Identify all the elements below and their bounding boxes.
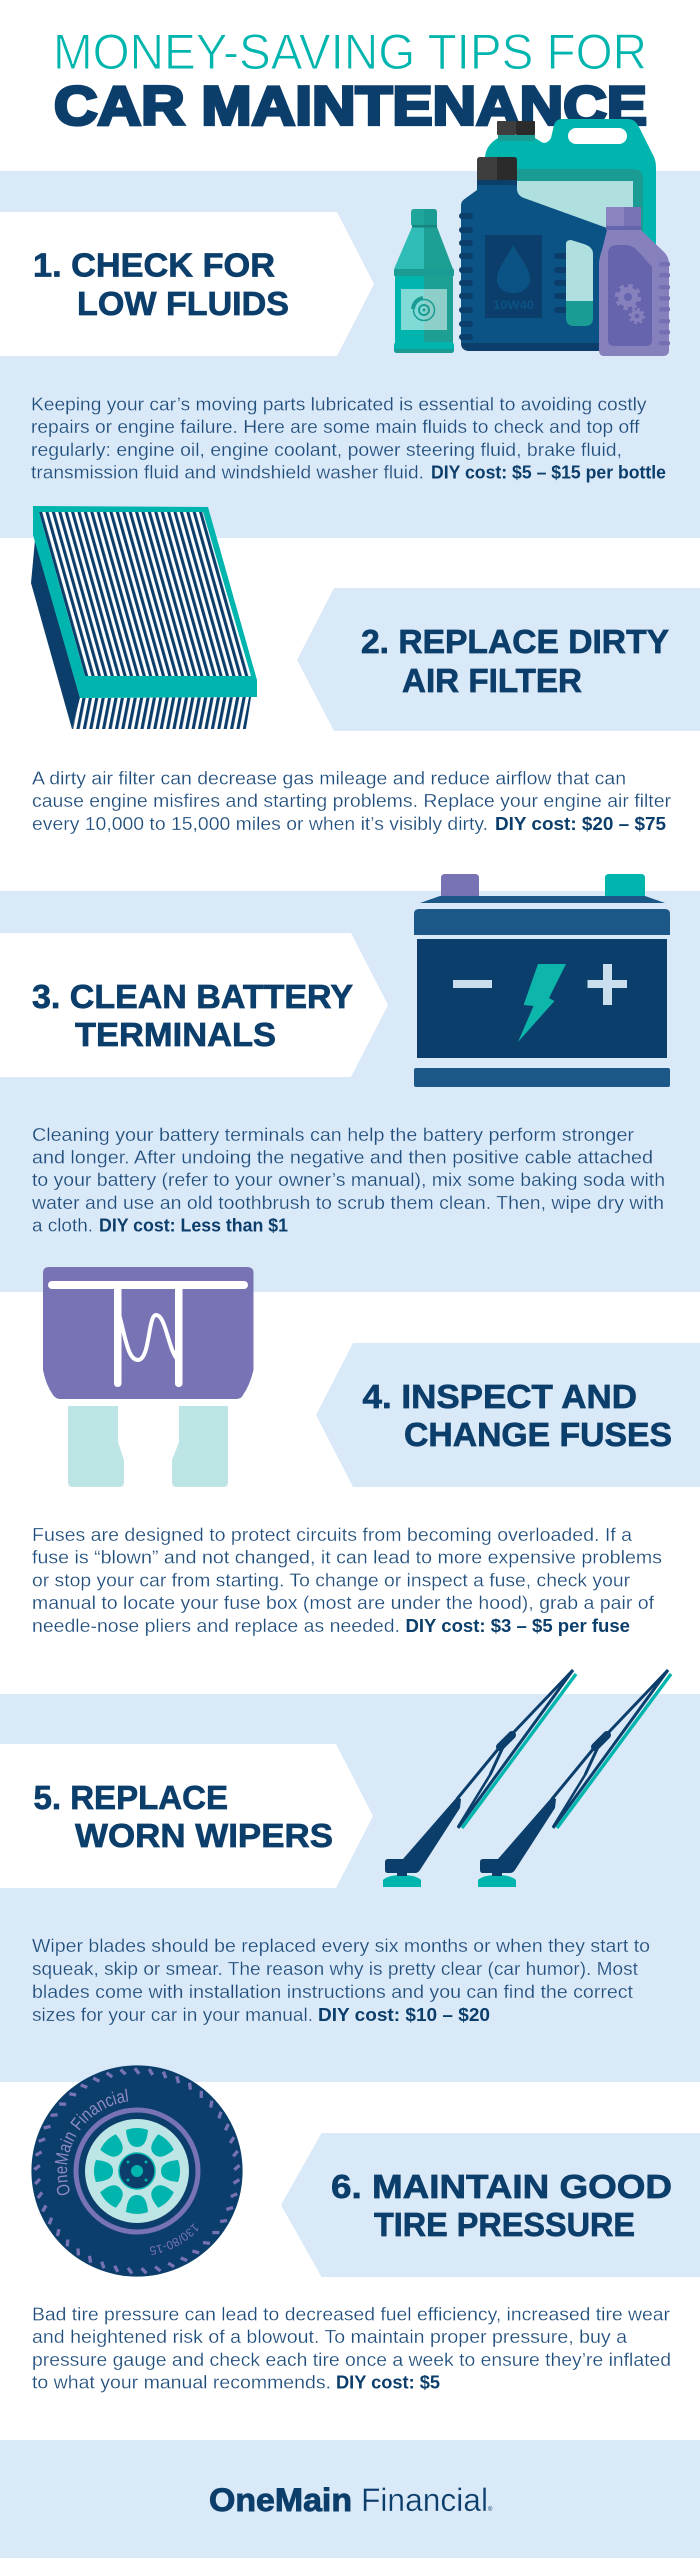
text block 5: Wiper blades should be replaced every six months or when they start to <box>32 1936 650 1956</box>
text block 4: Fuses are designed to protect circuits from becoming overloaded. If a <box>32 1525 633 1545</box>
icon: tire <box>31 2065 243 2277</box>
text block 4: manual to locate your fuse box (most are under the hood), grab a pair of <box>32 1593 655 1613</box>
text block 5: DIY cost: $10 – $20 <box>318 2005 490 2025</box>
text block 5: blades come with installation instructions and you can find the correct <box>32 1982 633 2002</box>
text block 4: or stop your car from starting. To change or inspect a fuse, check your <box>32 1571 630 1591</box>
panel: 3 clean battery terminals <box>0 874 670 1236</box>
text block 1: DIY cost: $5 – $15 per bottle <box>431 463 666 483</box>
text block 4 <box>32 1525 662 1636</box>
heading arrow 5: 5. REPLACE <box>34 1779 228 1816</box>
heading arrow 4 <box>316 1343 700 1487</box>
heading arrow 1: LOW FLUIDS <box>77 285 289 322</box>
text block 3: to your battery (refer to your owner’s manual), mix some baking soda with <box>32 1170 665 1190</box>
heading arrow 1 <box>0 212 374 356</box>
text block 6: to what your manual recommends. <box>32 2373 331 2393</box>
heading arrow 4: CHANGE FUSES <box>404 1416 672 1453</box>
text block 1: transmission fluid and windshield washer fluid. <box>31 463 424 483</box>
icon: fluid bottles <box>394 119 670 356</box>
heading arrow 3: 3. CLEAN BATTERY <box>32 978 353 1015</box>
icon: air filter <box>31 506 257 729</box>
panel: 4 inspect and change fuses <box>32 1267 700 1636</box>
text block 1: repairs or engine failure. Here are some main fluids to check and top off <box>31 417 641 437</box>
heading arrow 1: 1. CHECK FOR <box>33 246 275 284</box>
panel: 6 maintain good tire pressure <box>31 2065 700 2393</box>
heading arrow 3: TERMINALS <box>75 1016 276 1053</box>
text block 6: DIY cost: $5 <box>336 2373 440 2393</box>
blue jug <box>459 157 612 351</box>
title <box>53 24 647 136</box>
icon: battery <box>414 874 670 1087</box>
small teal bottle <box>394 209 454 353</box>
text block 1: regularly: engine oil, engine coolant, power steering fluid, brake fluid, <box>31 440 622 460</box>
text block 3: DIY cost: Less than $1 <box>99 1216 288 1236</box>
heading arrow 4: 4. INSPECT AND <box>362 1378 637 1415</box>
text block 2: A dirty air filter can decrease gas mileage and reduce airflow that can <box>32 768 626 788</box>
heading arrow 2 <box>297 588 700 731</box>
teal jug <box>485 119 656 300</box>
text block 5 <box>32 1936 650 2025</box>
footer logo: ® <box>488 2506 493 2513</box>
purple bottle <box>599 207 670 356</box>
text block 5: squeak, skip or smear. The reason why is pretty clear (car humor). Most <box>32 1959 638 1979</box>
text block 3 <box>31 1125 665 1236</box>
title: CAR MAINTENANCE <box>54 74 647 136</box>
text block 4: fuse is “blown” and not changed, it can lead to more expensive problems <box>32 1548 662 1568</box>
text block 6 <box>32 2305 671 2393</box>
text block 6: and heightened risk of a blowout. To maintain proper pressure, buy a <box>32 2327 628 2347</box>
text block 2: every 10,000 to 15,000 miles or when it’s visibly dirty. <box>32 814 488 834</box>
text block 3: a cloth. <box>32 1216 93 1236</box>
heading arrow 5 <box>0 1744 373 1888</box>
panel: 2 replace dirty air filter <box>31 506 700 834</box>
heading arrow 5: WORN WIPERS <box>75 1817 333 1854</box>
text block 1: Keeping your car’s moving parts lubricated is essential to avoiding costly <box>31 394 646 414</box>
text block 4: needle-nose pliers and replace as needed. <box>32 1616 400 1636</box>
text block 3: water and use an old toothbrush to scrub them clean. Then, wipe dry with <box>31 1193 664 1213</box>
panel: 1 check for low fluids <box>0 119 670 483</box>
footer logo: Financial <box>361 2482 488 2518</box>
heading arrow 2: 2. REPLACE DIRTY <box>361 623 669 660</box>
text block 3: Cleaning your battery terminals can help the battery perform stronger <box>32 1125 634 1145</box>
heading arrow 6: 6. MAINTAIN GOOD <box>331 2168 672 2205</box>
text block 4: DIY cost: $3 – $5 per fuse <box>406 1616 630 1636</box>
title: MONEY-SAVING TIPS FOR <box>53 24 647 80</box>
icon: fuse <box>43 1267 254 1487</box>
heading arrow 3 <box>0 933 388 1077</box>
icon: wiper left <box>383 1670 576 1887</box>
tread marks <box>34 2068 240 2274</box>
text block 3: and longer. After undoing the negative and then positive cable attached <box>32 1148 653 1168</box>
text block 2 <box>32 768 671 834</box>
panel: 5 replace worn wipers <box>0 1670 671 2025</box>
heading arrow 2: AIR FILTER <box>402 662 582 699</box>
text block 1 <box>31 394 666 483</box>
text block 6: Bad tire pressure can lead to decreased fuel efficiency, increased tire wear <box>32 2305 670 2325</box>
icon: tire: OneMain Financial <box>54 2088 128 2196</box>
text block 5: sizes for your car in your manual. <box>32 2005 313 2025</box>
text block 6: pressure gauge and check each tire once a week to ensure they’re inflated <box>32 2350 671 2370</box>
footer logo: OneMain <box>209 2482 352 2518</box>
icon: tire: 130/80-15 <box>150 2224 198 2255</box>
footer logo <box>209 2482 493 2518</box>
blue jug: 10W40 <box>493 298 534 312</box>
heading arrow 6 <box>281 2133 700 2277</box>
wheel spokes <box>94 2128 180 2214</box>
icon: wiper right <box>478 1670 671 1887</box>
text block 2: DIY cost: $20 – $75 <box>495 814 666 834</box>
text block 2: cause engine misfires and starting problems. Replace your engine air filter <box>32 791 671 811</box>
heading arrow 6: TIRE PRESSURE <box>374 2206 635 2243</box>
